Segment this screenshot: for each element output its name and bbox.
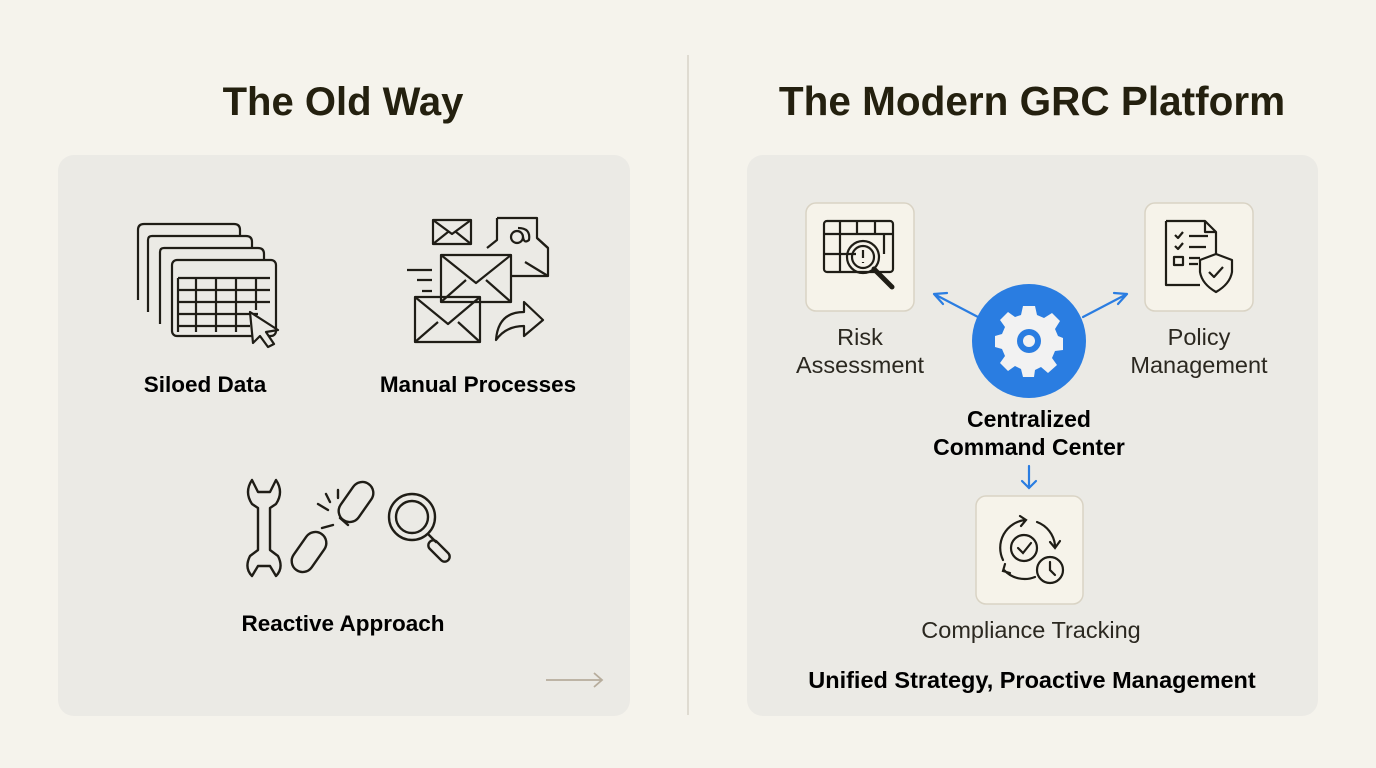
icon: manual processes emails bbox=[407, 218, 548, 342]
label: policy management: Policy bbox=[1168, 324, 1231, 350]
panel: modern platform: Management bbox=[1130, 352, 1268, 378]
label: compliance tracking: Compliance Tracking bbox=[921, 617, 1141, 643]
title: old way: The Old Way bbox=[223, 80, 464, 124]
panel: old way bbox=[58, 155, 630, 716]
panel: modern platform: Assessment bbox=[796, 352, 924, 378]
panel: modern platform bbox=[747, 155, 1318, 716]
label: unified strategy: Unified Strategy, Proactive Management bbox=[808, 667, 1256, 693]
card: compliance tracking icon bbox=[976, 496, 1083, 604]
label: reactive approach: Reactive Approach bbox=[242, 611, 444, 636]
icon: siloed data spreadsheets bbox=[138, 224, 278, 347]
card: policy management icon bbox=[1145, 203, 1253, 311]
label: manual processes: Manual Processes bbox=[380, 372, 576, 397]
label: siloed data: Siloed Data bbox=[144, 372, 267, 397]
card: risk assessment icon bbox=[806, 203, 914, 311]
icon: central gear hub bbox=[972, 284, 1086, 398]
arrow: decorative next bbox=[546, 673, 602, 687]
arrows: hub connections bbox=[934, 293, 1127, 488]
label: risk assessment: Risk bbox=[837, 324, 883, 350]
icon: reactive approach tools bbox=[247, 478, 452, 576]
title: modern platform: The Modern GRC Platform bbox=[779, 78, 1285, 124]
panel: modern platform: Command Center bbox=[933, 434, 1125, 460]
label: centralized command center: Centralized bbox=[967, 406, 1091, 432]
